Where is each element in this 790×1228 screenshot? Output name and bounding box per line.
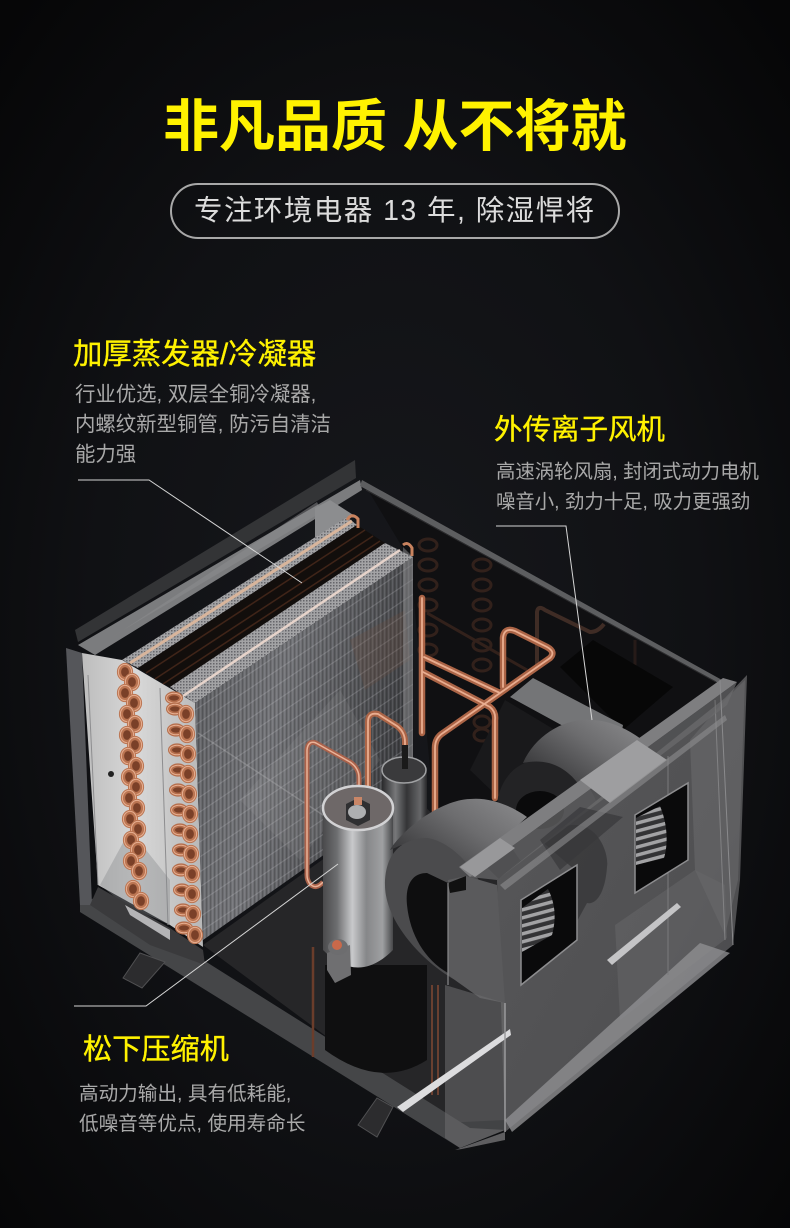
rear and interior glass (362, 480, 722, 880)
label: blower description: 高速涡轮风扇, 封闭式动力电机 噪音小, 劲力十足, 吸力更强劲 (496, 461, 759, 513)
front top glass strip (459, 678, 737, 890)
front blower (385, 799, 527, 1003)
intake window with fan: rear (635, 783, 688, 893)
lower glass door and floor streaks (397, 680, 733, 1150)
rear motor box and plate (470, 640, 673, 797)
right side housing panel (497, 675, 747, 1132)
floor and base rail (80, 795, 505, 1148)
label: condenser heading: 加厚蒸发器/冷凝器 (73, 338, 316, 371)
large compressor (307, 742, 393, 983)
flange and top rails (75, 460, 722, 684)
subtitle pill (170, 183, 620, 239)
small compressor (368, 714, 427, 845)
copper return bends: front column (167, 693, 202, 943)
title: 非凡品质 从不将就 (163, 95, 627, 158)
subtitle text: 专注环境电器 13 年, 除湿悍将 (194, 195, 596, 227)
copper manifold and rear pipes (422, 598, 552, 820)
leader line: blower (496, 526, 592, 720)
left side frame and end plate (66, 648, 205, 965)
evaporator fins (195, 547, 413, 940)
coil top bands (122, 516, 413, 703)
leader line: condenser (78, 480, 302, 583)
label: blower heading: 外传离子风机 (494, 414, 665, 446)
glass reflection line over fins (198, 733, 358, 838)
label: compressor heading: 松下压缩机 (83, 1034, 229, 1066)
leader line: compressor (74, 864, 338, 1006)
rear blower (497, 720, 645, 903)
intake window with fan: front (521, 865, 577, 985)
label: compressor description: 高动力输出, 具有低耗能, 低噪音等优点, 使用寿命长 (79, 1083, 305, 1134)
copper return bends: rear column (118, 664, 148, 909)
mounting feet (123, 953, 393, 1137)
compressor reflection on floor (313, 947, 438, 1095)
label: condenser description: 行业优选, 双层全铜冷凝器, 内螺纹新型铜管, 防污自清洁 能力强 (75, 384, 331, 466)
rear faint copper coil (419, 539, 635, 741)
